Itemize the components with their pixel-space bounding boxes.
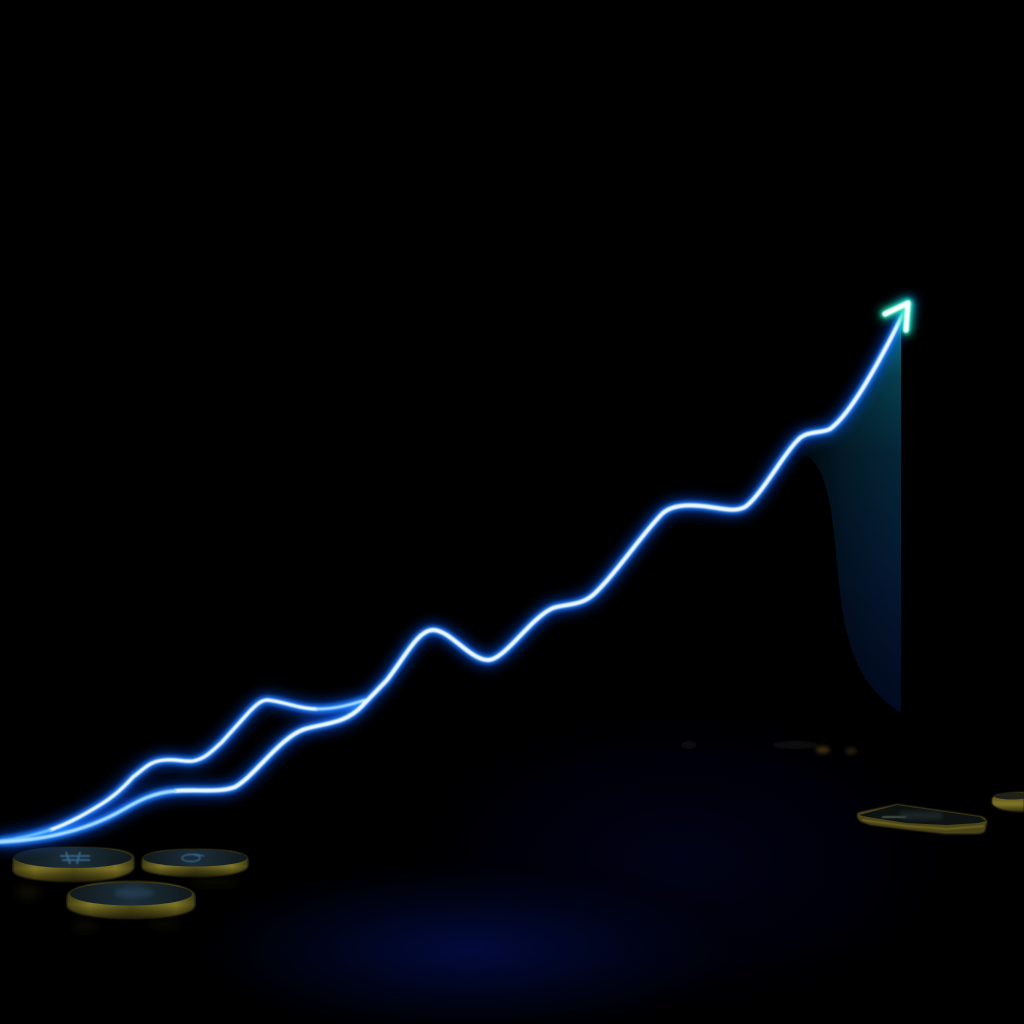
- coin: bottom: [67, 881, 195, 919]
- blurred distant lights: [681, 741, 857, 754]
- coin group: left: [13, 847, 248, 931]
- line: upper branch: [0, 700, 365, 841]
- coin: left front: [13, 847, 134, 882]
- floor glow: [170, 690, 980, 1024]
- neon line chart: [0, 304, 908, 842]
- coin: right edge: [992, 792, 1024, 812]
- translucent curtain under the line: [801, 322, 901, 713]
- gold bar: [857, 804, 987, 834]
- bright core: [0, 304, 908, 842]
- line: main trend: [0, 304, 908, 842]
- coin reflections: [16, 878, 241, 931]
- arrowhead: [885, 303, 908, 330]
- coin: right: [142, 849, 248, 877]
- mid glow: [0, 304, 908, 842]
- outer glow: [0, 304, 908, 842]
